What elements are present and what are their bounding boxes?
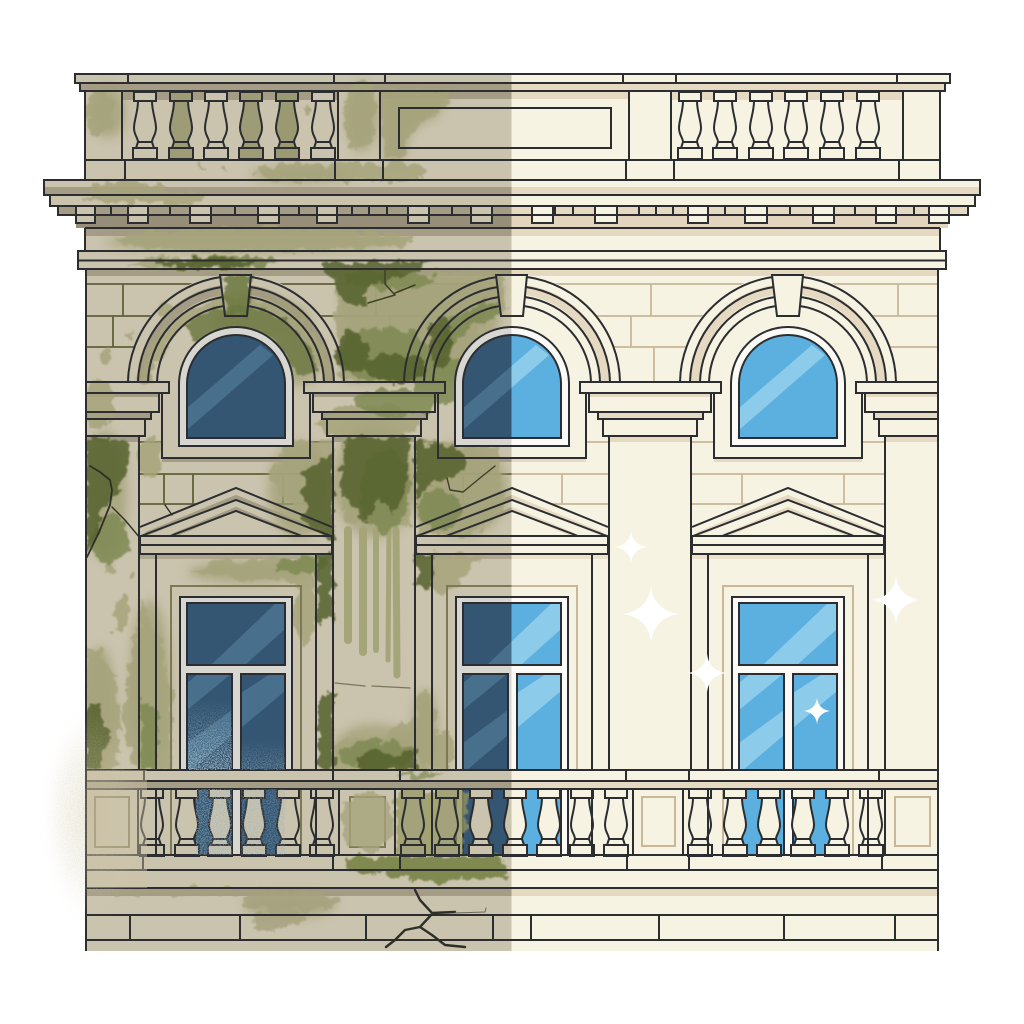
mid moss layer xyxy=(92,256,500,770)
stain on the pedestal xyxy=(341,792,393,852)
sparkle on right pier xyxy=(872,576,920,624)
small pediment crack xyxy=(165,505,172,515)
pier crack branch xyxy=(112,507,140,538)
windows: restored right half with bright glass xyxy=(171,327,853,855)
sparkle on window edge xyxy=(688,654,726,692)
sparkle xyxy=(615,531,647,563)
upper wall crack xyxy=(368,270,415,303)
building base: weathered left half xyxy=(45,75,512,951)
windows: weathered left half with dark glass xyxy=(171,327,853,855)
cracks in the stonework xyxy=(87,270,495,947)
linework and balusters: weathered side xyxy=(43,73,512,951)
stain on lower wall xyxy=(100,889,338,931)
building base: restored right half xyxy=(512,75,979,951)
moss behind the balusters xyxy=(397,792,470,855)
speckled wear on window glass xyxy=(188,700,285,855)
linework and balusters: restored side xyxy=(512,73,981,951)
water drip streaks on pier xyxy=(348,530,397,675)
moss on the plinth xyxy=(345,857,510,882)
lower rail and pedestals: restored side xyxy=(512,771,937,847)
dust cloud at lower left xyxy=(37,700,147,930)
moss on the rail xyxy=(398,772,442,778)
base crack tail xyxy=(455,908,486,913)
sparkle on glass xyxy=(804,698,830,724)
moss and water stains on walls xyxy=(83,80,508,918)
wall crack by second window xyxy=(447,466,495,492)
base crack xyxy=(386,890,465,947)
soft watercolor stain wash xyxy=(83,84,508,918)
stain layer xyxy=(83,80,505,770)
large sparkle xyxy=(623,586,679,642)
dark moss layer xyxy=(86,258,466,770)
moss on lower balustrade and plinth xyxy=(100,772,510,931)
pier crack xyxy=(87,466,112,557)
lower rail and pedestals: weathered side xyxy=(87,771,512,848)
hairline on central pier xyxy=(335,683,410,688)
